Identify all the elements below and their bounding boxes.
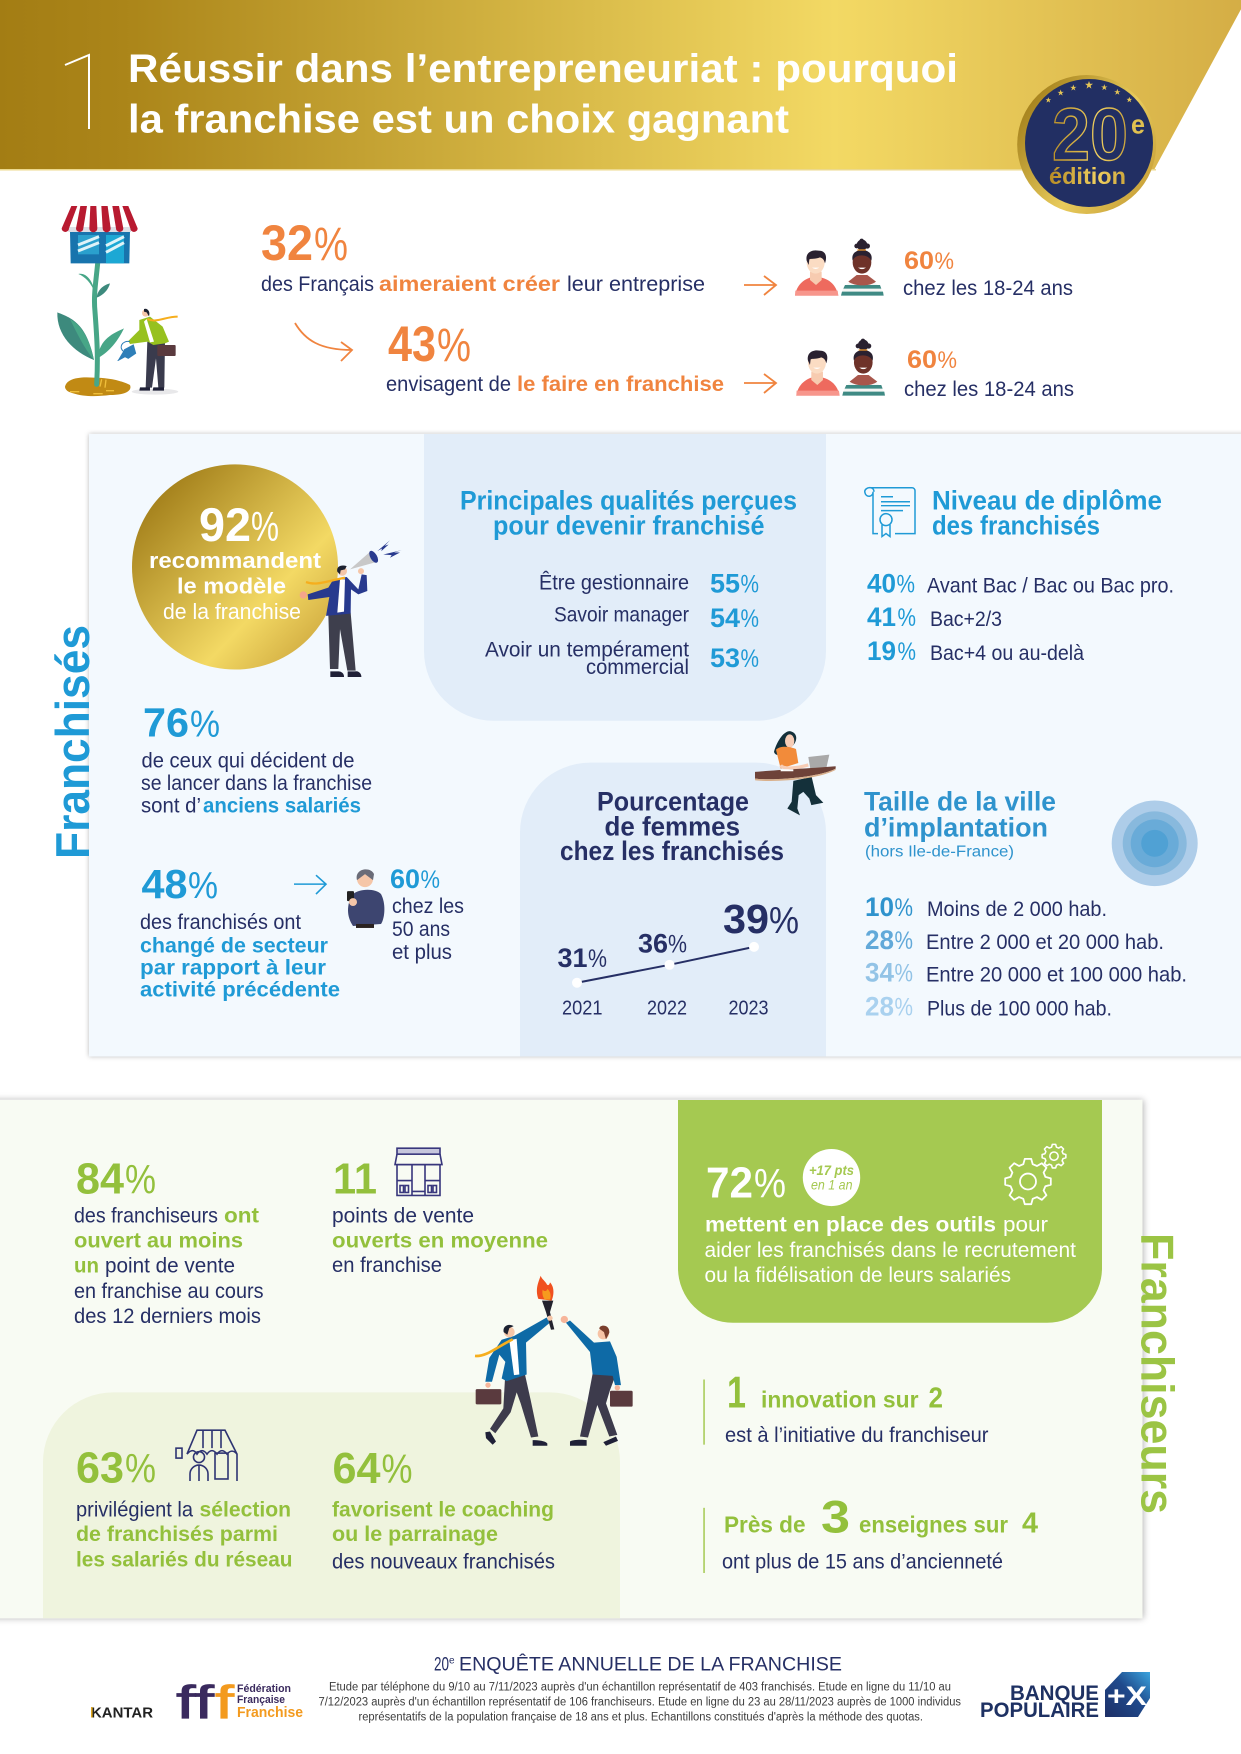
stat: 60% of 18-24 (second): % xyxy=(938,347,957,374)
list: qualités: 55 xyxy=(710,568,740,598)
footer: methodology note: Etude par téléphone du 9/10 au 7/11/2023 auprès d'un échantillon représentatif de 403 franchisés. Etude en ligne du 11/10 au xyxy=(329,1682,951,1694)
stat: 76%: sont d’ xyxy=(141,794,201,817)
arrow: 43% to 18-24 xyxy=(744,374,776,393)
stat: 1 innovation sur 2: est à l’initiative du franchiseur xyxy=(725,1424,989,1447)
stat: 60% of 18-24 (second): 60 xyxy=(907,346,937,374)
stat: 63%: de franchisés parmi xyxy=(76,1523,278,1546)
heading: Franchiseurs vertical: Franchiseurs xyxy=(1132,1233,1184,1514)
heading: taille de la ville xyxy=(864,786,1056,860)
list: taille de ville: % xyxy=(894,894,913,922)
footer title: ENQUÊTE ANNUELLE DE LA FRANCHISE xyxy=(459,1654,842,1676)
stat: 84%: 84 xyxy=(76,1155,125,1203)
list: niveau de diplôme: % xyxy=(897,604,916,632)
logo: Banque Populaire: BANQUE xyxy=(1010,1682,1099,1705)
icon: young man and woman xyxy=(795,239,884,296)
list: taille de ville: 34 xyxy=(865,958,894,988)
panel: principales qualités xyxy=(424,434,826,721)
stat: près de 3 enseignes sur 4: ont plus de 15 ans d’ancienneté xyxy=(722,1551,1003,1574)
line chart: 31, 36, 39 xyxy=(557,896,799,1020)
stat: 60% aged 50+: 50 ans xyxy=(392,918,450,941)
stat: 76%: se lancer dans la franchise xyxy=(141,772,372,795)
stat: 48%: changé de secteur xyxy=(140,934,328,957)
list: qualités xyxy=(485,568,759,679)
logo: Fédération Française Franchise: Fédération xyxy=(237,1683,291,1695)
stat: près de 3 enseignes sur 4: 4 xyxy=(1022,1508,1038,1540)
stat: 60% aged 50+: et plus xyxy=(392,941,452,964)
stat: 48%: par rapport à leur xyxy=(140,956,326,979)
icon: shop front xyxy=(395,1148,442,1195)
list: taille de ville: % xyxy=(894,927,913,955)
panel: light green block xyxy=(43,1392,620,1618)
panel: pourcentage de femmes xyxy=(520,763,826,1056)
curved arrow xyxy=(295,323,352,361)
illustration: man with megaphone xyxy=(300,540,402,677)
stat: 1 innovation sur 2: 1 xyxy=(727,1366,746,1417)
stat: 72%: 72 xyxy=(706,1159,753,1207)
stat: 11 points de vente: points de vente xyxy=(332,1204,474,1227)
text: mettent en place des outils: mettent en place des outils xyxy=(705,1213,996,1236)
icon: young man and woman second xyxy=(796,339,885,396)
heading: principales qualités: Principales qualités perçues xyxy=(460,486,797,516)
section number 1 xyxy=(65,55,89,129)
line chart: 31, 36, 39: % xyxy=(668,930,687,958)
heading: niveau de diplôme xyxy=(932,486,1162,541)
list: taille de ville: Plus de 100 000 hab. xyxy=(927,998,1112,1021)
stat: 48%: des franchisés ont xyxy=(140,911,301,934)
stat: près de 3 enseignes sur 4: 3 xyxy=(821,1491,850,1543)
stat: 60% aged 50+ xyxy=(390,864,464,964)
stat: 60% aged 50+: 60 xyxy=(390,864,420,894)
badge: +17 pts en 1 an: +17 pts xyxy=(809,1162,854,1178)
list: qualités: % xyxy=(740,645,759,673)
callout: 92% gold circle: de la franchise xyxy=(163,599,301,624)
stat: 1 innovation sur 2: innovation sur xyxy=(761,1386,919,1412)
list: qualités: % xyxy=(740,570,759,598)
heading: principales qualités: pour devenir franchisé xyxy=(493,511,765,541)
logo: Fédération Française Franchise: Franchise xyxy=(237,1704,303,1721)
arrow: 48% to 60% xyxy=(294,875,326,894)
stat: 84%: ont xyxy=(224,1204,259,1227)
stat: 84% xyxy=(74,1155,264,1328)
stat: 43%: % xyxy=(437,318,471,371)
list: taille de ville: 28 xyxy=(865,992,894,1022)
stat: 32%: % xyxy=(314,217,348,270)
heading: Franchisés vertical: Franchisés xyxy=(46,625,99,859)
stat: 11 points de vente: en franchise xyxy=(332,1254,442,1277)
line chart: 31, 36, 39: 39 xyxy=(723,896,769,942)
line chart: 31, 36, 39: % xyxy=(588,945,607,973)
stat: 32%: aimeraient créer xyxy=(379,273,560,296)
badge: +17 pts en 1 an xyxy=(803,1149,860,1206)
stat: 60% of 18-24 (second): chez les 18-24 ans xyxy=(904,378,1074,401)
footer: methodology note: représentatifs de la population française de 18 ans et plus. Echantillons constitués d'après la méthode des quotas. xyxy=(358,1712,923,1724)
list: niveau de diplôme: 40 xyxy=(867,568,896,598)
stat: 63%: les salariés du réseau xyxy=(76,1549,293,1572)
logo: Banque Populaire xyxy=(980,1672,1150,1722)
stat: 64%: des nouveaux franchisés xyxy=(332,1551,555,1574)
list: qualités: 53 xyxy=(710,643,740,673)
stat: 11 points de vente: 11 xyxy=(333,1155,377,1203)
stat: près de 3 enseignes sur 4: Près de xyxy=(724,1512,806,1538)
stat: 43%: envisagent de xyxy=(386,373,511,396)
stat: 63%: % xyxy=(125,1446,156,1491)
line chart: 31, 36, 39: 36 xyxy=(638,928,668,958)
heading: taille de la ville: Taille de la ville xyxy=(864,786,1056,816)
badge: +17 pts en 1 an: en 1 an xyxy=(811,1177,853,1192)
stat: 1 innovation sur 2 xyxy=(703,1366,989,1447)
stat: 60% aged 50+: chez les xyxy=(392,895,464,918)
icon: shop with person xyxy=(176,1430,237,1481)
callout: 92% gold circle: 92 xyxy=(199,499,251,551)
list: niveau de diplôme: Bac+2/3 xyxy=(930,608,1002,631)
stat: 84%: un xyxy=(74,1255,99,1278)
stat: 60% of 18-24 (second) xyxy=(904,346,1074,401)
list: qualités: Être gestionnaire xyxy=(539,571,689,594)
icon: diploma xyxy=(865,488,915,537)
stat: 43% xyxy=(386,316,724,396)
text: mettent en place des outils: pour xyxy=(1003,1213,1048,1236)
stat: 84%: % xyxy=(125,1157,156,1202)
stat: 72%: % xyxy=(754,1161,786,1206)
stat: 64% xyxy=(332,1444,555,1574)
heading: pourcentage de femmes: de femmes xyxy=(604,811,740,841)
line chart: 31, 36, 39: % xyxy=(769,900,799,942)
list: taille de ville: Entre 2 000 et 20 000 hab. xyxy=(926,931,1164,954)
stat: 64%: ou le parrainage xyxy=(332,1523,498,1546)
heading: pourcentage de femmes: Pourcentage xyxy=(597,786,749,816)
stat: 76%: 76 xyxy=(143,700,189,746)
stat: 63%: sélection xyxy=(200,1498,291,1521)
stat: 84%: ouvert au moins xyxy=(74,1230,243,1253)
icon: gears xyxy=(1005,1144,1066,1204)
heading: taille de la ville: (hors Ile-de-France) xyxy=(865,843,1014,860)
stat: 60% of 18-24 (first): chez les 18-24 ans xyxy=(903,277,1073,300)
stat: 84%: des franchiseurs xyxy=(74,1204,218,1227)
stat: 76%: % xyxy=(190,704,220,746)
stat: 63%: privilégient la xyxy=(76,1498,193,1521)
illustration: shop growing as a plant, man watering xyxy=(57,206,178,396)
stat: 48% xyxy=(140,861,340,1002)
list: qualités: commercial xyxy=(586,656,689,679)
logo: Fédération Française Franchise: Française xyxy=(237,1694,285,1706)
stat: 32%: des Français xyxy=(261,273,374,296)
heading: niveau de diplôme: des franchisés xyxy=(932,511,1100,541)
stat: près de 3 enseignes sur 4: enseignes sur xyxy=(859,1512,1008,1538)
stat: 43%: le faire en franchise xyxy=(517,373,724,396)
illustration: woman at desk with laptop xyxy=(755,731,836,815)
heading: pourcentage de femmes xyxy=(560,786,784,866)
heading: niveau de diplôme: Niveau de diplôme xyxy=(932,486,1162,516)
logo: Fédération Française Franchise: ff xyxy=(176,1676,214,1728)
list: qualités: Avoir un tempérament xyxy=(485,639,689,662)
arrow: 32% to 18-24 xyxy=(744,276,776,295)
list: taille de ville: 28 xyxy=(865,925,894,955)
stat: 11 points de vente: ouverts en moyenne xyxy=(332,1230,548,1253)
logo: Fédération Française Franchise: f xyxy=(215,1676,234,1728)
list: taille de ville: Entre 20 000 et 100 000 hab. xyxy=(926,964,1187,987)
stat: 60% of 18-24 (first): 60 xyxy=(904,247,934,275)
list: taille de ville xyxy=(865,892,1187,1022)
text: mettent en place des outils: aider les franchisés dans le recrutement xyxy=(704,1239,1076,1262)
stat: 60% of 18-24 (first) xyxy=(903,247,1073,300)
illustration: man with phone xyxy=(347,869,384,928)
list: niveau de diplôme: Avant Bac / Bac ou Bac pro. xyxy=(927,574,1174,597)
stat: 64%: favorisent le coaching xyxy=(332,1498,554,1521)
stat: 64%: 64 xyxy=(333,1444,381,1493)
title xyxy=(128,47,958,142)
badge: 20e édition: 20 xyxy=(1052,93,1128,176)
stat: 76% xyxy=(141,700,372,817)
callout: 92% gold circle: % xyxy=(251,503,279,550)
panel: franchisés background xyxy=(89,434,1241,1056)
illustration: two businessmen passing a torch xyxy=(475,1276,633,1446)
title: la franchise est un choix gagnant xyxy=(128,98,789,142)
heading: taille de la ville: d’implantation xyxy=(864,812,1048,842)
badge: 20e édition xyxy=(1017,75,1156,214)
footer title: e xyxy=(449,1656,455,1666)
heading: pourcentage de femmes: chez les franchisés xyxy=(560,836,784,866)
logo: Fédération Française Franchise xyxy=(176,1676,303,1728)
callout: 92% gold circle: le modèle xyxy=(177,573,286,598)
icon: concentric circles xyxy=(1112,800,1198,886)
panel: green 72% outils xyxy=(678,1100,1102,1323)
stat: 43%: 43 xyxy=(388,316,436,372)
stat: 60% aged 50+: % xyxy=(420,866,440,894)
callout: 92% gold circle xyxy=(132,464,338,670)
logo: Banque Populaire: POPULAIRE xyxy=(980,1699,1099,1722)
stat: 64%: % xyxy=(382,1446,413,1492)
stat: 76%: de ceux qui décident de xyxy=(141,750,354,773)
panel: franchiseurs background xyxy=(0,1100,1142,1618)
stat: 84%: des 12 derniers mois xyxy=(74,1305,261,1328)
callout: 92% gold circle: recommandent xyxy=(149,548,322,573)
list: niveau de diplôme: % xyxy=(897,638,916,666)
stat: 32%: 32 xyxy=(261,215,313,271)
stat: 32%: leur entreprise xyxy=(567,273,705,296)
section: franchisés xyxy=(89,434,1241,1056)
footer: methodology note xyxy=(318,1682,961,1724)
list: taille de ville: % xyxy=(894,994,913,1022)
line chart: 31, 36, 39: 2021 xyxy=(562,998,603,1020)
line chart: 31, 36, 39: 31 xyxy=(557,943,588,973)
badge: 20e édition: édition xyxy=(1049,163,1126,189)
line chart: 31, 36, 39: 2022 xyxy=(647,998,687,1020)
header banner xyxy=(0,0,1241,170)
text: mettent en place des outils xyxy=(704,1213,1076,1287)
list: qualités: % xyxy=(740,605,759,633)
logo: Kantar: KANTAR xyxy=(91,1706,154,1722)
stat: 84%: en franchise au cours xyxy=(74,1280,264,1303)
list: niveau de diplôme: 41 xyxy=(867,602,896,632)
list: niveau de diplôme: 19 xyxy=(867,636,896,666)
stat: 72% xyxy=(706,1159,786,1207)
stat: 63%: 63 xyxy=(76,1444,124,1492)
stat: 11 points de vente xyxy=(332,1155,548,1277)
title: Réussir dans l’entrepreneuriat : pourquoi xyxy=(128,47,958,91)
stat: 60% of 18-24 (first): % xyxy=(934,248,954,275)
footer title: 20 xyxy=(434,1654,449,1676)
stat: près de 3 enseignes sur 4 xyxy=(703,1491,1038,1574)
stat: 32% xyxy=(261,215,705,296)
text: mettent en place des outils: ou la fidélisation de leurs salariés xyxy=(704,1264,1011,1287)
list: qualités: Savoir manager xyxy=(554,604,689,627)
stat: 48%: activité précédente xyxy=(140,979,340,1002)
section: franchiseurs xyxy=(0,1100,1142,1618)
line chart: 31, 36, 39: 2023 xyxy=(728,998,768,1020)
list: qualités: 54 xyxy=(710,603,740,633)
stat: 48%: 48 xyxy=(141,861,187,907)
list: niveau de diplôme: Bac+4 ou au-delà xyxy=(930,642,1084,665)
list: taille de ville: Moins de 2 000 hab. xyxy=(927,898,1107,921)
heading: principales qualités xyxy=(460,486,797,541)
footer: methodology note: 7/12/2023 auprès d'un échantillon représentatif de 106 franchiseurs. Etude en ligne du 23 au 28/11/2023 auprès de 1000 individus xyxy=(318,1696,961,1708)
stat: 1 innovation sur 2: 2 xyxy=(928,1382,943,1414)
logo: Banque Populaire: +X xyxy=(1107,1681,1147,1711)
stat: 48%: % xyxy=(188,865,218,907)
list: taille de ville: 10 xyxy=(865,892,894,922)
badge: 20e édition: e xyxy=(1131,110,1145,140)
list: niveau de diplôme: % xyxy=(896,570,915,598)
stat: 76%: anciens salariés xyxy=(203,794,361,817)
stat: 84%: point de vente xyxy=(105,1255,235,1278)
list: niveau de diplôme xyxy=(867,568,1174,666)
list: taille de ville: % xyxy=(894,960,913,988)
stat: 63% xyxy=(76,1444,293,1572)
